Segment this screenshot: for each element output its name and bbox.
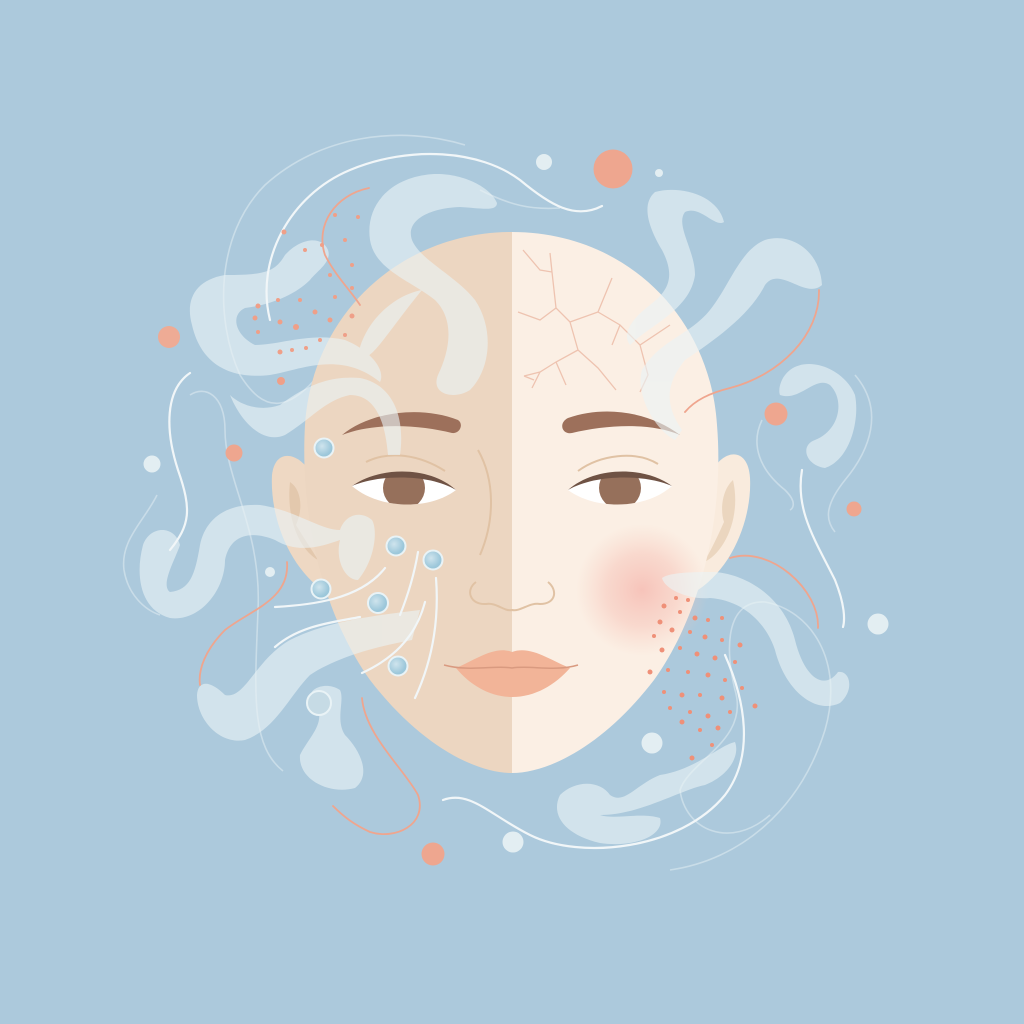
coral circles bbox=[158, 150, 862, 866]
forehead cracks bbox=[518, 250, 670, 392]
right eyebrow bbox=[562, 412, 680, 435]
left ear inner bbox=[289, 482, 318, 560]
left ear bbox=[272, 456, 345, 590]
cheek blush bbox=[576, 524, 708, 656]
translucent white swirls bbox=[140, 174, 856, 844]
coral dots lower right bbox=[648, 596, 758, 760]
coral flowing lines bbox=[200, 188, 819, 834]
water droplets bbox=[307, 438, 442, 715]
lips bbox=[444, 650, 578, 697]
thin background swirl lines bbox=[124, 135, 872, 870]
left eye bbox=[352, 472, 456, 504]
head left half bbox=[304, 232, 512, 773]
white flowing lines bbox=[169, 154, 844, 848]
right ear inner bbox=[704, 480, 735, 562]
right eye bbox=[568, 472, 672, 504]
coral dots upper left bbox=[252, 213, 360, 385]
left eyebrow bbox=[342, 412, 461, 435]
white circles bbox=[144, 154, 888, 852]
illustration: face with hydrated and dry skin halves bbox=[122, 134, 888, 871]
head right half bbox=[512, 232, 718, 773]
nose and face lines bbox=[366, 450, 658, 610]
right ear bbox=[685, 454, 750, 590]
